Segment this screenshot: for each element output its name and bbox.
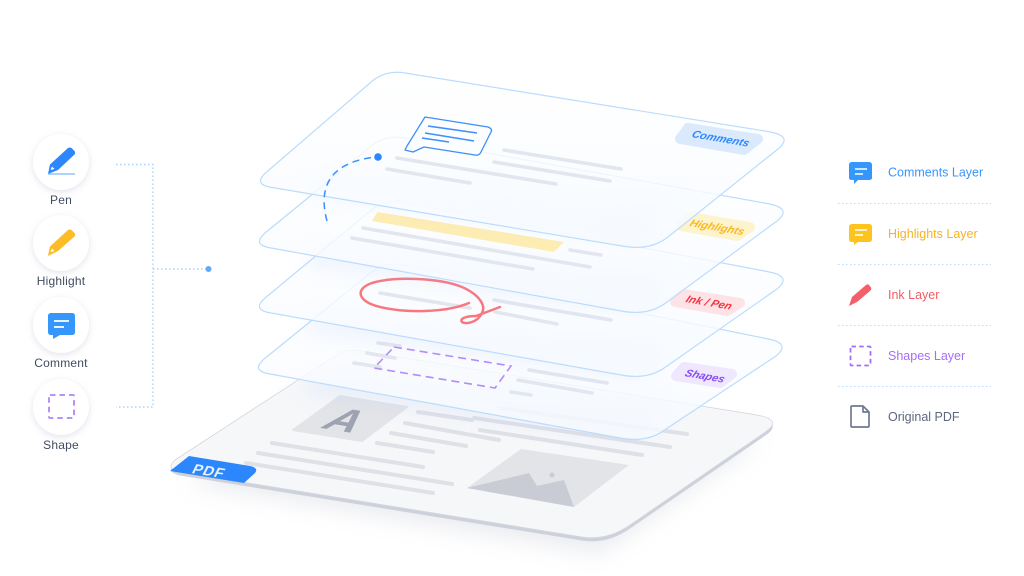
shapes bars [354,343,607,395]
shapes label: Shapes [683,368,727,385]
dashed selection rectangle [374,347,511,388]
legend: Highlights Layer: Highlights Layer [888,227,978,241]
legend: Ink Layer: Ink Layer [888,288,939,302]
PDF base page [170,350,773,552]
ink bars [380,293,611,324]
comments bars [387,150,621,184]
legend: Comments Layer [849,162,983,184]
tool: Shape [33,379,89,452]
connector [116,164,212,407]
tool: Shape: Shape [43,438,79,452]
letter A tile [293,396,407,441]
layer: comments [260,72,784,247]
red freehand circle [361,279,500,323]
layer: shapes [258,264,782,440]
comment bubble [405,117,492,155]
yellow highlight band [372,212,564,252]
legend: Comments Layer: Comments Layer [888,166,983,180]
letter A tile: A [315,400,374,440]
tool: Comment [33,297,89,370]
highlights bars [352,228,601,269]
ink label: Ink / Pen [684,294,734,312]
legend: Shapes Layer: Shapes Layer [888,349,965,363]
tool: Pen [33,134,89,207]
PDF tag [170,456,256,483]
layer: highlights [259,137,783,312]
legend: Highlights Layer [849,224,978,245]
legend: Shapes Layer [850,346,965,366]
dashed arrow [324,153,382,221]
tool: Highlight [33,215,89,288]
legend: Original PDF [851,406,960,427]
tool: Highlight: Highlight [37,274,86,288]
legend dividers [838,204,991,386]
layer: ink [259,201,783,378]
PDF tag: PDF [189,462,228,482]
tool: Pen: Pen [50,193,72,207]
comments label: Comments [690,129,751,149]
page text lines [246,408,687,493]
legend: Ink Layer [849,284,939,306]
picture placeholder [467,449,629,507]
tool: Comment: Comment [34,356,88,370]
highlights label: Highlights [688,218,746,238]
legend: Original PDF: Original PDF [888,410,960,424]
